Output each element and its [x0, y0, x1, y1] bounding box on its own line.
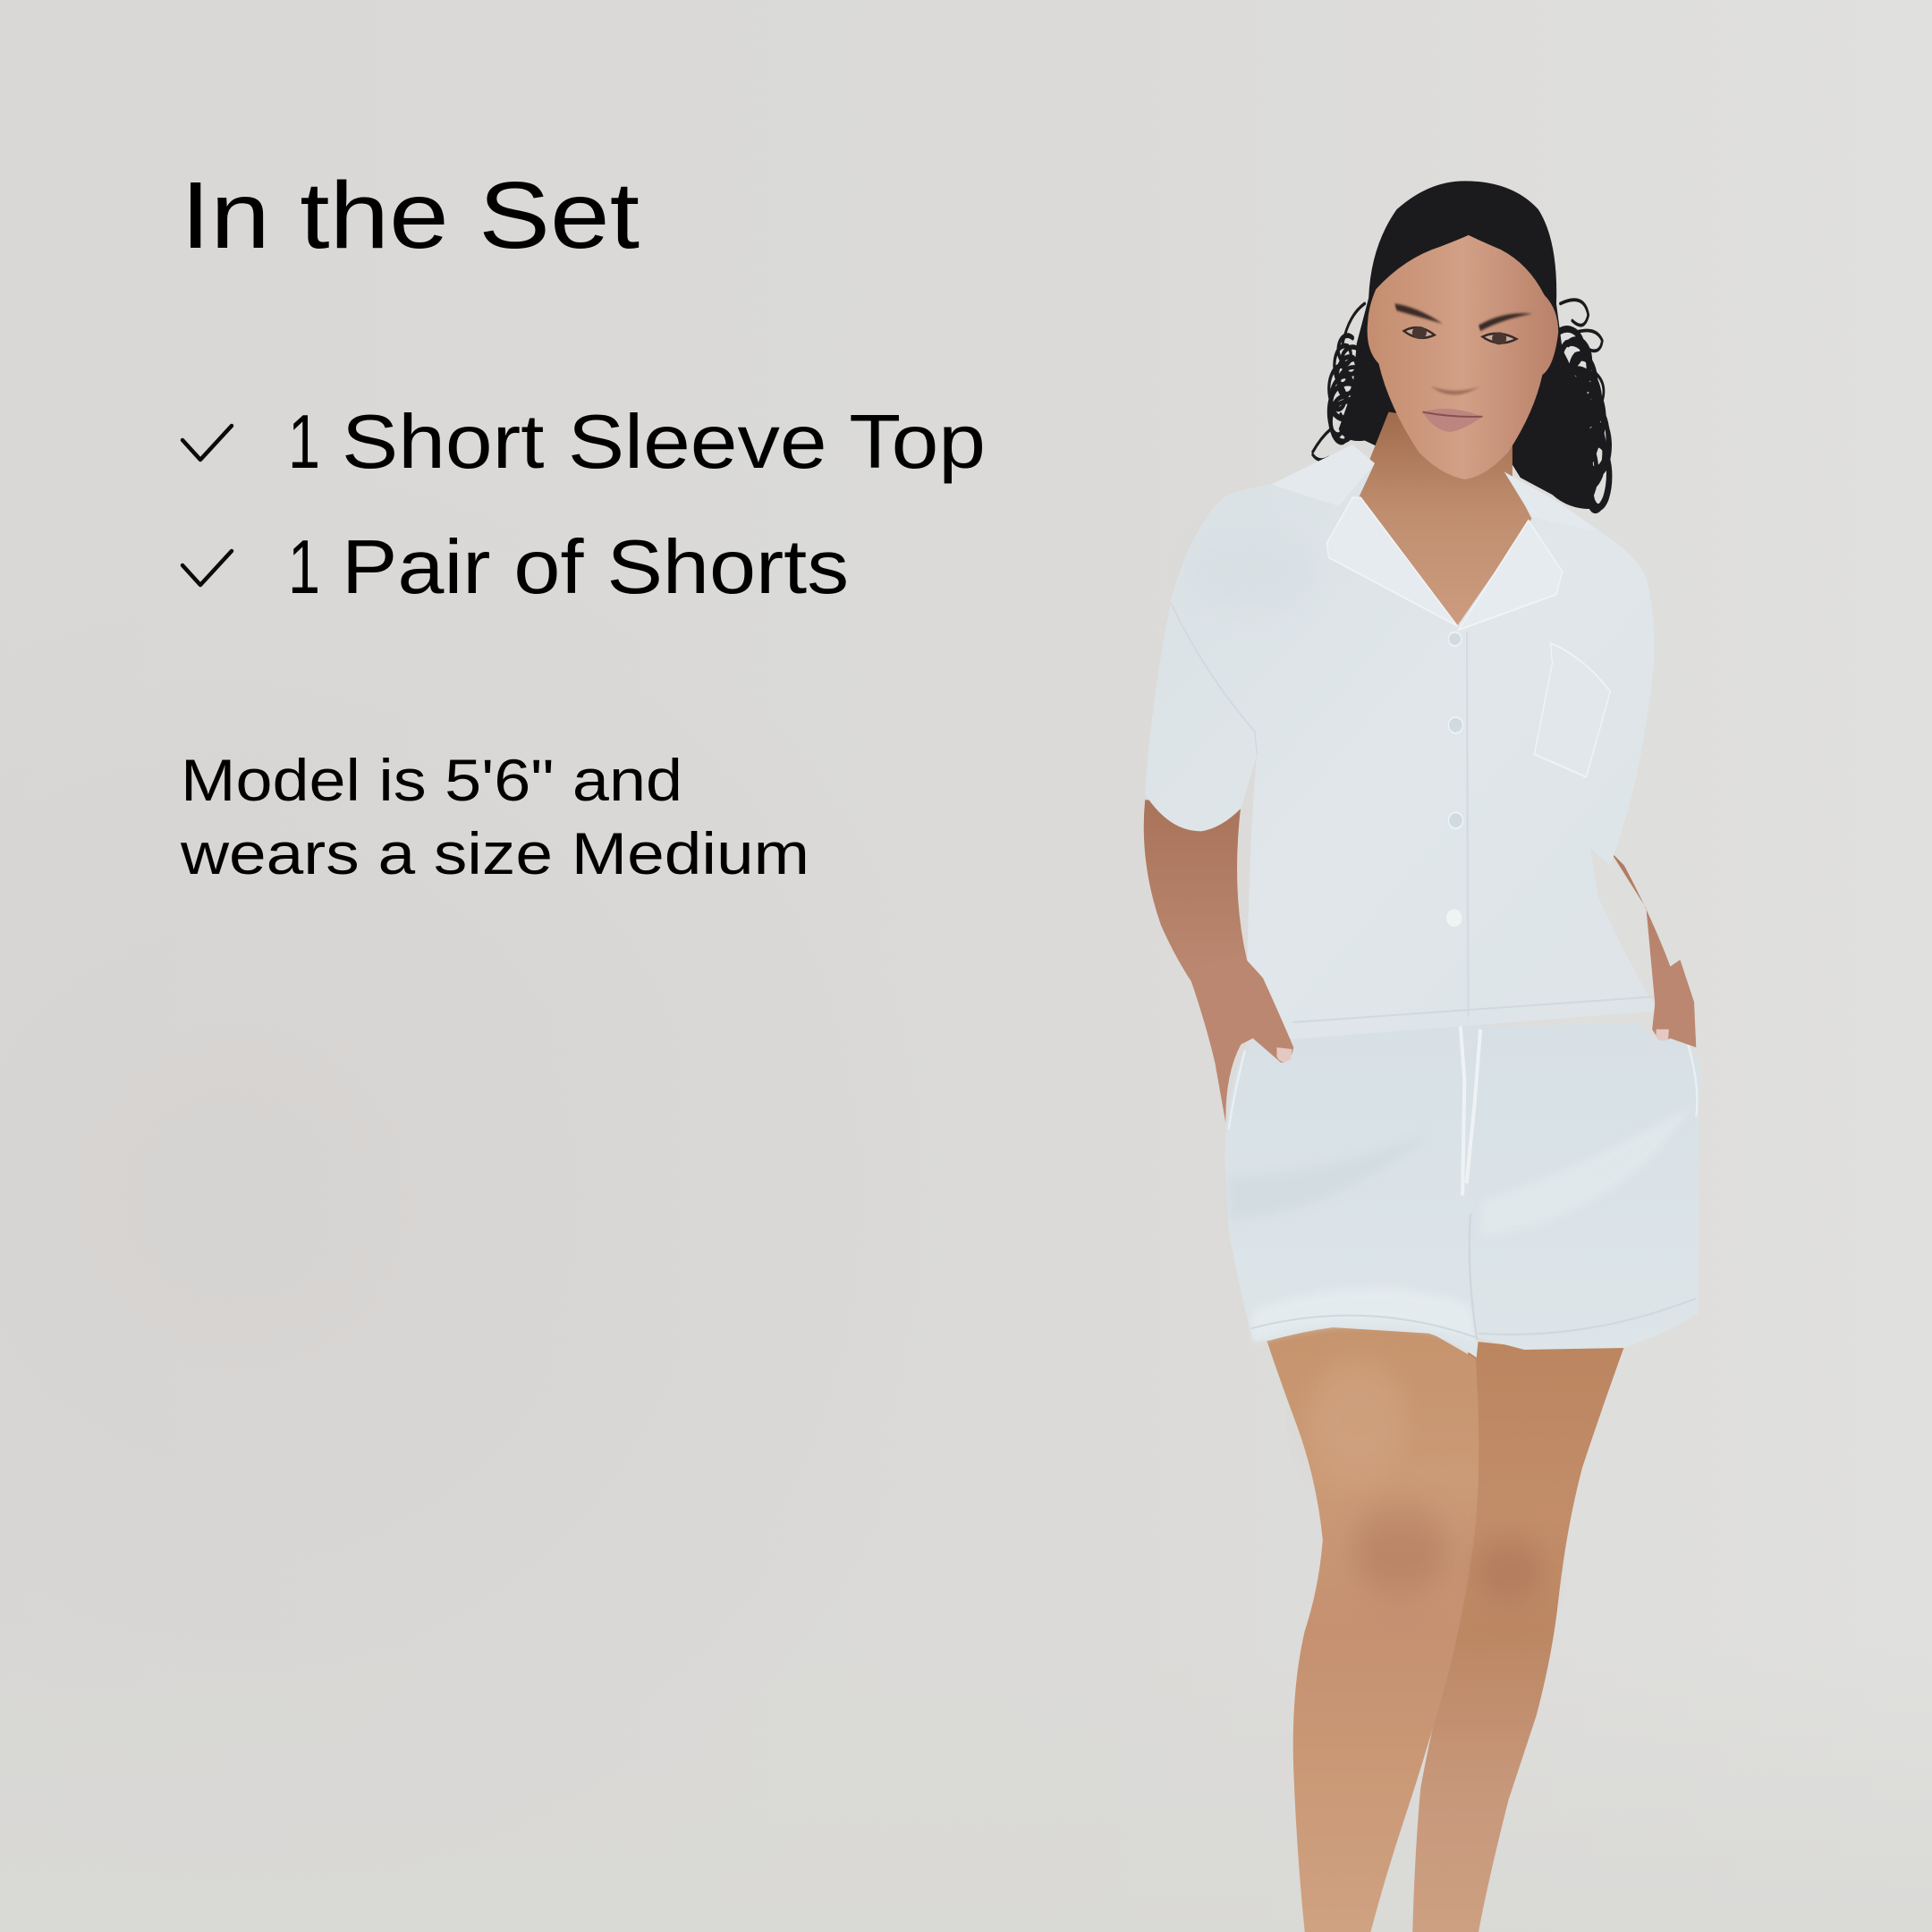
shoulder shading: [1189, 532, 1317, 612]
item: short sleeve top: Short Sleeve Top: [342, 400, 986, 485]
lapels: [1326, 497, 1457, 626]
buttons: [1447, 632, 1463, 926]
shorts: [1224, 1023, 1701, 1358]
item: pair of shorts: Pair of Shorts: [342, 525, 849, 610]
neck and chest: [1357, 412, 1532, 626]
checklist: [182, 400, 986, 610]
lips: [1422, 409, 1482, 432]
legs: [1267, 1326, 1624, 1932]
item: pair of shorts: 1: [288, 525, 320, 610]
short sleeve top: [1145, 445, 1658, 1039]
placket: [1467, 631, 1469, 1017]
nose: [1430, 386, 1480, 394]
model note: Model is 5'6" and: [181, 747, 682, 813]
face: [1368, 235, 1558, 479]
shorts folds: [1229, 1105, 1692, 1341]
right leg: [1412, 1341, 1624, 1932]
item: pair of shorts: [182, 525, 849, 610]
title: In the Set: [181, 163, 640, 268]
hair: [1313, 181, 1610, 510]
eyes: [1403, 327, 1516, 343]
arms: [1144, 800, 1696, 1039]
item: short sleeve top: 1: [288, 400, 320, 485]
pocket: [1534, 643, 1610, 777]
left leg: [1267, 1326, 1479, 1932]
collar: [1271, 445, 1600, 532]
sleeve seam: [1171, 603, 1257, 754]
model note: wears a size Medium: [180, 820, 809, 886]
eyebrows: [1394, 303, 1532, 331]
model note: [180, 747, 809, 886]
hem seam: [1292, 996, 1654, 1022]
hands: [1187, 953, 1696, 1123]
model figure: [1144, 181, 1701, 1932]
